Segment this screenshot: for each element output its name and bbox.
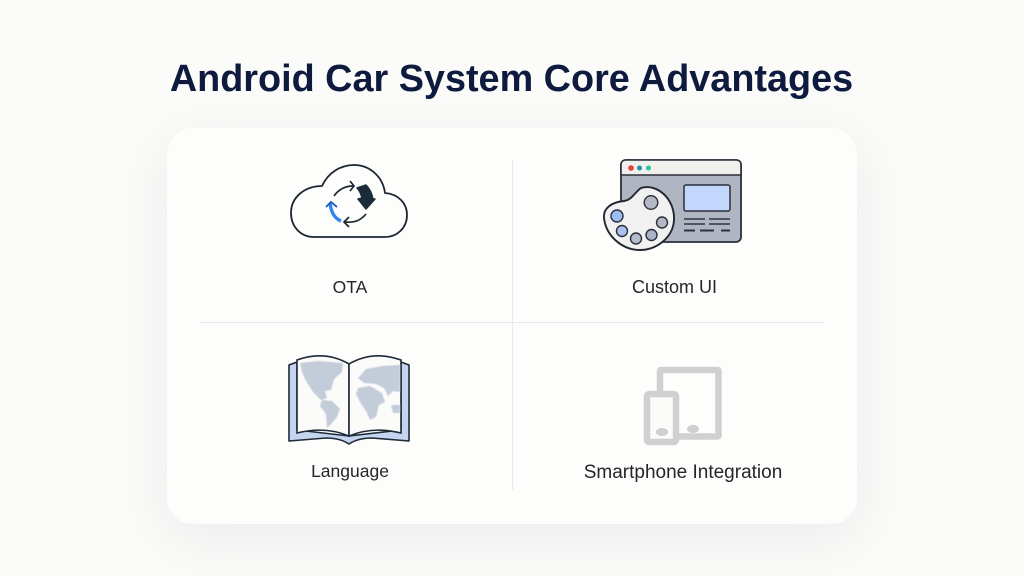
palette: [604, 187, 674, 250]
left page: [297, 356, 349, 436]
book cover: [289, 362, 409, 444]
label: Language: Language: [311, 461, 389, 481]
icon: open book with world map: [289, 356, 409, 444]
label: OTA: OTA: [333, 277, 367, 297]
right page: [349, 356, 401, 436]
window title bar: [621, 160, 741, 175]
tablet: [660, 370, 718, 436]
panel: advantages card: [167, 128, 857, 524]
phone: [647, 394, 676, 442]
window screen panel: [684, 185, 730, 211]
title: Android Car System Core Advantages: [170, 58, 853, 100]
icon: tablet and phone: [647, 370, 718, 442]
window body: [621, 160, 741, 242]
icon: cloud with sync arrows: [291, 165, 407, 237]
label: Smartphone Integration: Smartphone Integration: [584, 462, 782, 483]
label: Custom UI: Custom UI: [632, 277, 717, 297]
icon: palette over UI window: [604, 160, 741, 250]
map: world landmasses: [300, 361, 400, 428]
